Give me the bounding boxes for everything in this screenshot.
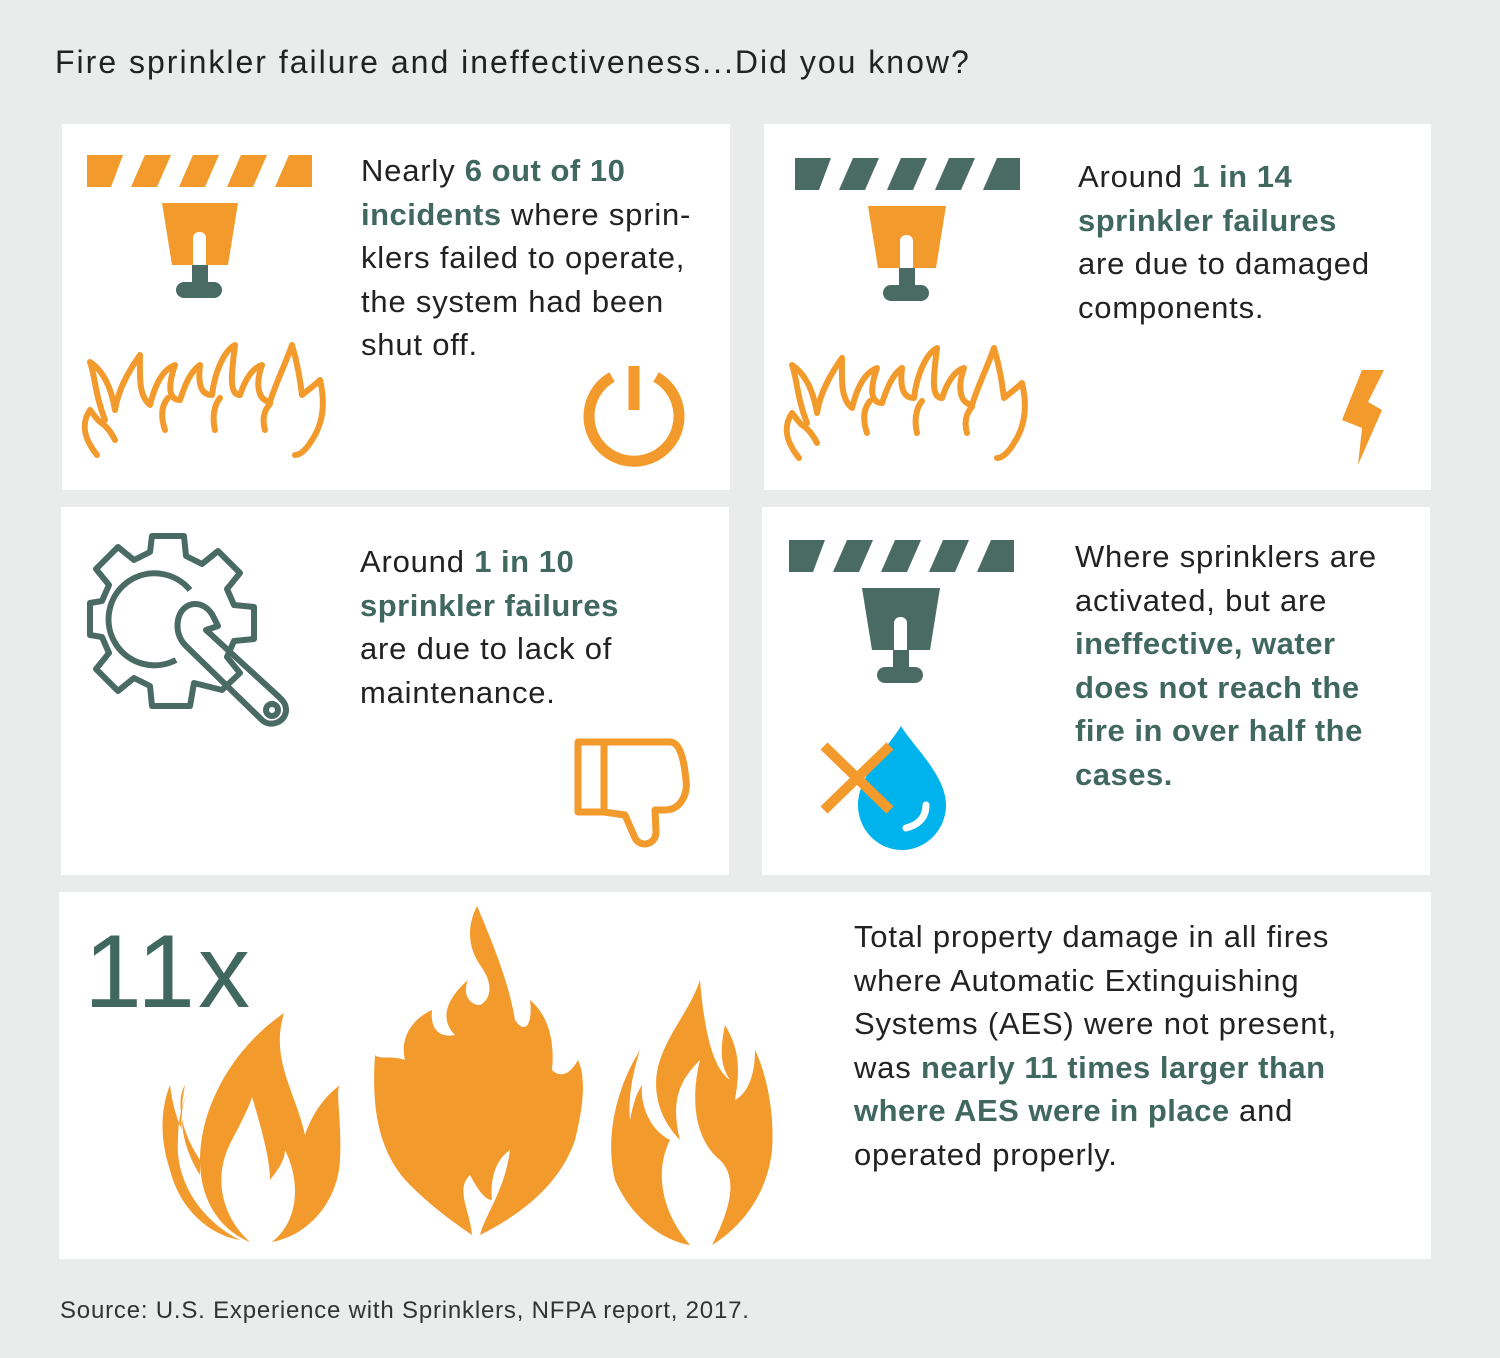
source: Source: U.S. Experience with Sprinklers, NFPA report, 2017. <box>60 1297 750 1324</box>
icon: big flame 2 <box>374 906 583 1235</box>
icon: sprinkler orange <box>87 155 312 298</box>
icon: lightning <box>1342 370 1384 465</box>
text: property damage: Total property damage in all fires <box>854 919 1329 954</box>
stat: 11x: 11x <box>84 914 253 1030</box>
icon: sprinkler teal 1 <box>795 158 1020 301</box>
icon: thumbs down <box>578 742 686 844</box>
text: damaged components: sprinkler failures <box>1078 203 1337 238</box>
icon: big flame 3 <box>611 980 773 1245</box>
text: ineffective: activated, but are <box>1075 583 1327 618</box>
text: shut off: Nearly 6 out of 10 <box>361 153 625 188</box>
text: ineffective: does not reach the <box>1075 670 1360 705</box>
icon: gear with wrench <box>90 536 286 724</box>
text: shut off: the system had been <box>361 284 664 319</box>
title: Fire sprinkler failure and ineffectiveness...Did you know? <box>55 44 971 80</box>
panel: ineffective <box>762 507 1430 875</box>
text: damaged components: are due to damaged <box>1078 246 1370 281</box>
text: maintenance: sprinkler failures <box>360 588 619 623</box>
text: damaged components: components. <box>1078 290 1264 325</box>
text: ineffective: fire in over half the <box>1075 713 1363 748</box>
icon: power <box>589 366 679 461</box>
text: maintenance: Around 1 in 10 <box>360 544 574 579</box>
text: ineffective: ineffective, water <box>1075 626 1336 661</box>
icon: water drop with cross <box>824 726 946 850</box>
icon: sprinkler teal 2 <box>789 540 1014 683</box>
panel: damaged components <box>764 124 1431 490</box>
text: property damage <box>854 919 1337 1172</box>
text: damaged components: Around 1 in 14 <box>1078 159 1292 194</box>
icon: big flame 1 <box>162 1013 340 1242</box>
panel: maintenance <box>61 507 729 875</box>
text: property damage: operated properly. <box>854 1137 1118 1172</box>
icon: flames outline 1 <box>85 345 323 455</box>
text: property damage: where AES were in place and <box>854 1093 1293 1128</box>
text: shut off <box>361 153 691 362</box>
text: shut off: incidents where sprin- <box>361 197 691 232</box>
text: ineffective: cases. <box>1075 757 1173 792</box>
panel: property damage <box>59 892 1431 1259</box>
text: maintenance: are due to lack of <box>360 631 612 666</box>
text: shut off: klers failed to operate, <box>361 240 685 275</box>
text: maintenance: maintenance. <box>360 675 556 710</box>
text: ineffective <box>1075 539 1377 792</box>
text: property damage: where Automatic Extinguishing <box>854 963 1299 998</box>
text: damaged components <box>1078 159 1370 325</box>
text: property damage: was nearly 11 times larger than <box>854 1050 1326 1085</box>
text: ineffective: Where sprinklers are <box>1075 539 1377 574</box>
text: maintenance <box>360 544 619 710</box>
panel: shut off <box>62 124 730 490</box>
text: shut off: shut off. <box>361 327 478 362</box>
text: property damage: Systems (AES) were not present, <box>854 1006 1337 1041</box>
icon: flames outline 2 <box>787 348 1025 458</box>
